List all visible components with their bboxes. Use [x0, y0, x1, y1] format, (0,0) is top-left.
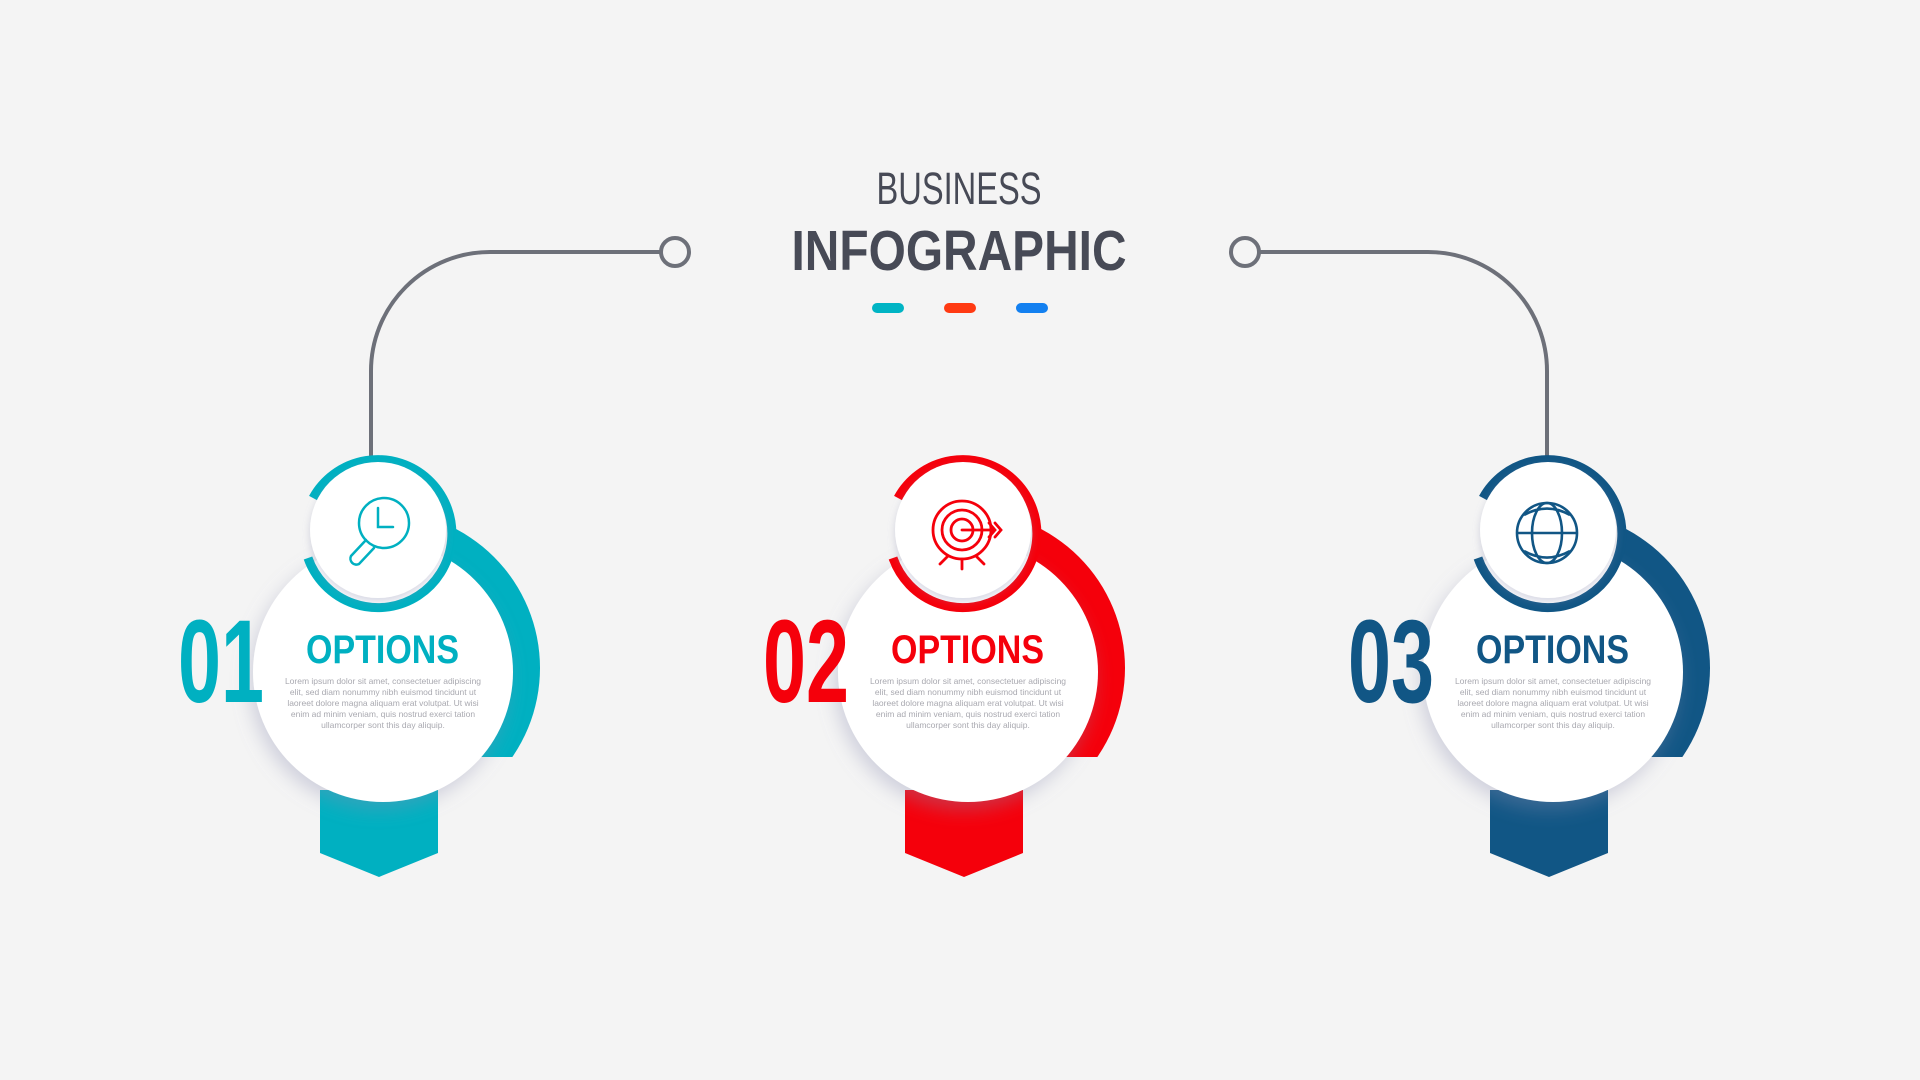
body text: laoreet dolore magna aliquam erat volutpat. Ut wisi [872, 698, 1064, 708]
color dashes [872, 303, 1048, 313]
title: INFOGRAPHIC [792, 219, 1126, 283]
body text: enim ad minim veniam, quis nostrud exerci tation [1461, 709, 1645, 719]
body text: elit, sed diam nonummy nibh euismod tincidunt ut [875, 687, 1062, 697]
heading OPTIONS: OPTIONS [891, 628, 1044, 672]
body text [285, 676, 481, 730]
icon: target [933, 501, 1001, 569]
body text [1455, 676, 1651, 730]
connector left [371, 238, 689, 458]
body text: Lorem ipsum dolor sit amet, consectetuer adipiscing [1455, 676, 1651, 686]
body text: enim ad minim veniam, quis nostrud exerci tation [291, 709, 475, 719]
icon: globe [1517, 503, 1577, 563]
connector right [1231, 238, 1547, 458]
body text: ullamcorper sont this day aliquip. [1491, 720, 1615, 730]
title [792, 163, 1126, 283]
body text: laoreet dolore magna aliquam erat volutpat. Ut wisi [287, 698, 479, 708]
body text: Lorem ipsum dolor sit amet, consectetuer adipiscing [285, 676, 481, 686]
title: BUSINESS [876, 163, 1042, 214]
body text: enim ad minim veniam, quis nostrud exerci tation [876, 709, 1060, 719]
body text: elit, sed diam nonummy nibh euismod tincidunt ut [290, 687, 477, 697]
number 01: 01 [178, 596, 264, 728]
panel 3 [1348, 460, 1710, 877]
heading OPTIONS: OPTIONS [306, 628, 459, 672]
panel 1 [178, 460, 540, 877]
body text: Lorem ipsum dolor sit amet, consectetuer adipiscing [870, 676, 1066, 686]
panel 2 [763, 460, 1125, 877]
body text: elit, sed diam nonummy nibh euismod tincidunt ut [1460, 687, 1647, 697]
body text: ullamcorper sont this day aliquip. [321, 720, 445, 730]
body text [870, 676, 1066, 730]
body text: laoreet dolore magna aliquam erat volutpat. Ut wisi [1457, 698, 1649, 708]
number 02: 02 [763, 596, 849, 728]
number 03: 03 [1348, 596, 1434, 728]
body text: ullamcorper sont this day aliquip. [906, 720, 1030, 730]
heading OPTIONS: OPTIONS [1476, 628, 1629, 672]
icon: magnifier clock [350, 498, 409, 565]
